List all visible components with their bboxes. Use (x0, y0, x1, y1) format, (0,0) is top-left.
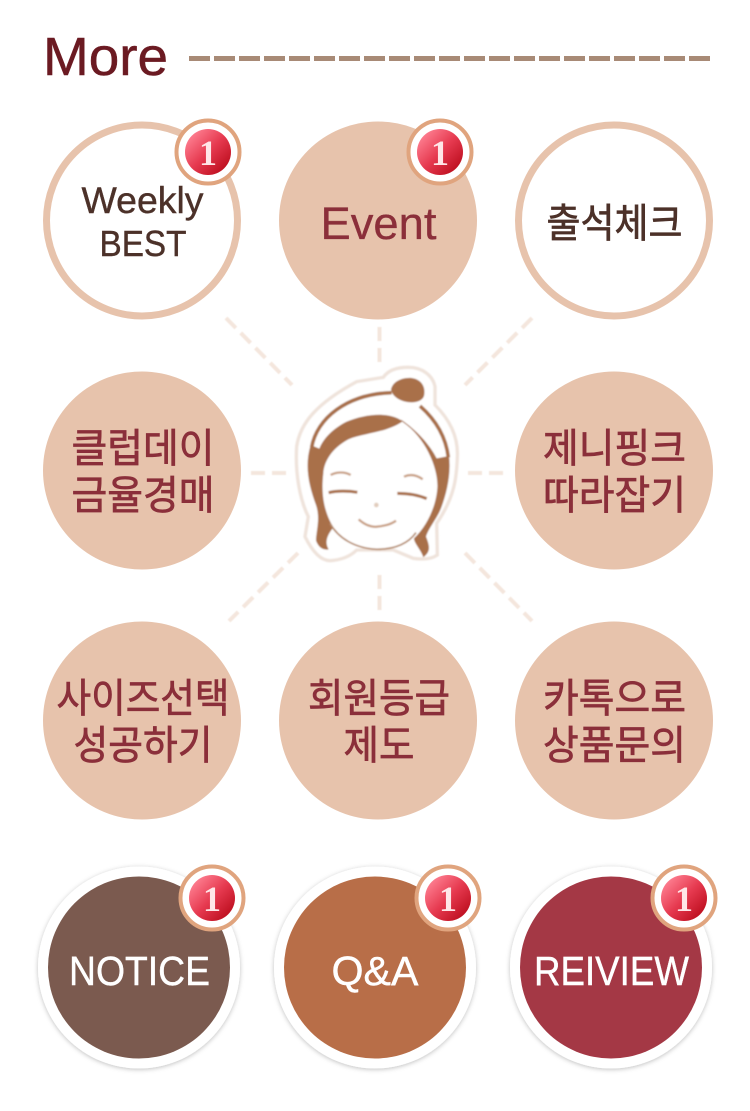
panel: Weekly BEST: BEST (100, 223, 187, 264)
badge: Q&A count: 1 (439, 879, 457, 919)
icon: smiling girl face (296, 367, 457, 561)
panel: attendance check (518, 125, 710, 316)
panel: size selection: 사이즈선택 (56, 677, 230, 721)
panel: NOTICE (38, 866, 240, 1068)
badge: REIVIEW count: 1 (675, 879, 693, 919)
badge: Q&A count (416, 866, 480, 930)
panel: club day auction: 금율경매 (72, 474, 214, 518)
panel: Jenny pink: 따라잡기 (543, 474, 686, 518)
badge: Event count: 1 (431, 133, 449, 173)
panel: membership grade: 제도 (344, 724, 414, 768)
panel: Jenny pink (515, 372, 713, 570)
panel: Q&A: Q&A (332, 948, 419, 994)
panel: REIVIEW: REIVIEW (534, 948, 689, 994)
panel: size selection (43, 622, 241, 820)
panel: membership grade (279, 622, 477, 820)
panel: NOTICE: NOTICE (69, 948, 210, 994)
panel: kakao inquiry: 상품문의 (543, 724, 686, 768)
badge: NOTICE count (180, 866, 244, 930)
panel: kakao inquiry (515, 622, 713, 820)
badge: NOTICE count: 1 (203, 879, 221, 919)
panel: Event: Event (320, 198, 437, 249)
panel: Weekly BEST (46, 125, 238, 316)
badge: Event count (408, 120, 472, 184)
title: More (43, 27, 168, 87)
panel: REIVIEW (510, 866, 712, 1068)
badge: Weekly BEST count: 1 (199, 133, 217, 173)
panel: kakao inquiry: 카톡으로 (543, 677, 686, 721)
panel: club day auction: 클럽데이 (72, 427, 214, 471)
panel: membership grade: 회원등급 (308, 677, 450, 721)
panel: attendance check: 출석체크 (546, 202, 682, 246)
panel: Jenny pink: 제니핑크 (543, 427, 686, 471)
badge: REIVIEW count (652, 866, 716, 930)
panel: club day auction (43, 372, 241, 570)
panel: size selection: 성공하기 (74, 724, 212, 768)
panel: Weekly BEST: Weekly (82, 180, 204, 221)
panel: Q&A (274, 866, 476, 1068)
panel: Event (279, 122, 477, 320)
badge: Weekly BEST count (176, 120, 240, 184)
title dashed rule (189, 56, 711, 61)
radial dashed rays (226, 318, 532, 621)
